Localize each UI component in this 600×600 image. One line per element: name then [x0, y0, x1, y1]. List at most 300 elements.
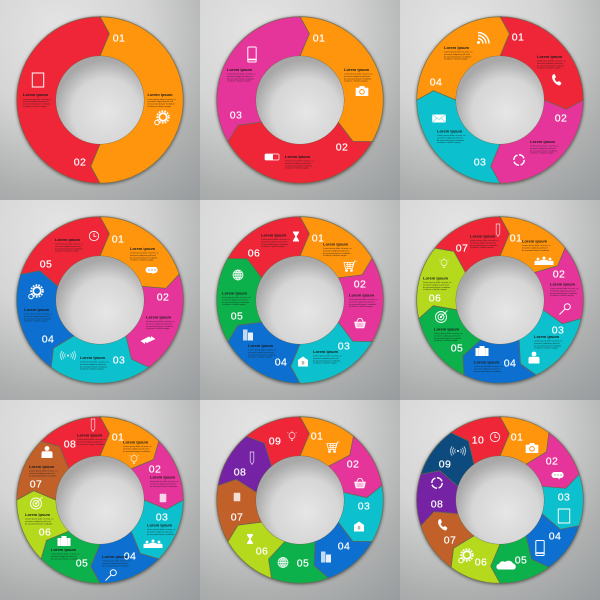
text block 07 — [29, 464, 58, 477]
text block 03: do eiusmod tempor incididunt — [313, 359, 341, 362]
icon: team — [534, 256, 554, 265]
text block 07: do eiusmod tempor incididunt — [470, 244, 498, 247]
number 06: 06 — [248, 248, 260, 260]
text block 02: Lorem ipsum — [146, 314, 172, 319]
panel background — [400, 0, 600, 200]
text block 03 — [437, 128, 466, 144]
text block 02: Lorem ipsum dolor sit amet, co — [150, 480, 179, 483]
text block 03: Lorem ipsum dolor sit amet, co — [147, 528, 176, 531]
number 02: 02 — [74, 157, 86, 169]
text block 06 — [25, 512, 54, 525]
text block 01: nsectetur adipiscing elit sed — [522, 246, 548, 250]
text block 03: Lorem ipsum dolor sit amet, co — [227, 73, 256, 76]
segment 06 — [0, 480, 78, 559]
text block 01: Lorem ipsum — [522, 238, 548, 243]
text block 01: do eiusmod tempor incididunt — [323, 252, 351, 255]
segment 06 — [404, 243, 473, 319]
text block 05 — [55, 237, 84, 253]
text block 03: nsectetur adipiscing elit sed — [227, 75, 253, 78]
segment 06 — [451, 536, 500, 583]
icon: tablet — [32, 73, 44, 87]
text block 02: do eiusmod tempor incididunt — [550, 292, 578, 295]
icon: home — [354, 522, 364, 532]
number 02: 02 — [553, 269, 565, 281]
segment 04 — [453, 325, 536, 403]
icon: globe — [278, 558, 288, 568]
text block 04 — [248, 343, 277, 359]
text block 03: Lorem ipsum — [534, 334, 560, 339]
text block 03: Lorem ipsum — [227, 67, 253, 72]
panel background — [0, 0, 200, 200]
text block 04: do eiusmod tempor incididunt — [102, 564, 130, 567]
number 01: 01 — [312, 233, 324, 245]
number 04: 04 — [504, 358, 516, 370]
text block 06 — [423, 275, 452, 291]
segment 04 — [80, 522, 159, 600]
text block 01: Lorem ipsum — [344, 67, 370, 72]
text block 03 — [80, 355, 109, 371]
text block 04: do eiusmod tempor incididunt — [444, 55, 472, 58]
text block 05: do eiusmod tempor incididunt — [51, 557, 79, 560]
text block 04: do eiusmod tempor incididunt — [24, 317, 52, 320]
segment 05 — [261, 532, 328, 597]
ring of 6 segments — [192, 196, 408, 404]
segment 01 — [100, 417, 159, 469]
icon: team — [144, 540, 162, 548]
number 05: 05 — [40, 259, 52, 271]
icon: battery — [265, 154, 279, 160]
text block 05: ut labore et dolore magna — [434, 339, 459, 342]
segment 08 — [406, 464, 466, 526]
segment 01 — [500, 217, 565, 273]
text block 03: nsectetur adipiscing elit sed — [437, 136, 463, 140]
text block 03: do eiusmod tempor incididunt — [437, 139, 465, 142]
text block 02: do eiusmod tempor incididunt — [146, 325, 174, 328]
text block 02: do eiusmod tempor incididunt — [150, 485, 178, 488]
text block 07: Lorem ipsum dolor sit amet, co — [29, 470, 58, 473]
text block 02: ut labore et dolore magna — [146, 327, 171, 330]
number 06: 06 — [256, 546, 268, 558]
segment 07 — [435, 197, 519, 283]
text block 04: nsectetur adipiscing elit sed — [248, 351, 274, 354]
text block 01: nsectetur adipiscing elit sed — [130, 254, 156, 257]
text block 05: Lorem ipsum dolor sit amet, co — [51, 553, 80, 556]
segment 03 — [283, 311, 372, 404]
segment 06 — [228, 196, 317, 289]
text block 02 — [146, 314, 175, 330]
number 03: 03 — [558, 492, 570, 504]
icon: cart — [327, 442, 340, 452]
icon: hourglass — [293, 232, 299, 242]
panel: 4-step ring — [400, 0, 600, 200]
number 02: 02 — [347, 459, 359, 471]
segment 02 — [222, 79, 372, 214]
text block 03 — [534, 334, 563, 350]
text block 01: Lorem ipsum dolor sit amet, co — [537, 60, 566, 63]
icon: bulb — [288, 430, 296, 440]
number 04: 04 — [549, 531, 561, 543]
centre circle — [256, 456, 344, 544]
text block 03: Lorem ipsum dolor sit amet, co — [534, 340, 563, 343]
segment 01 — [300, 17, 383, 142]
segment 07 — [17, 441, 69, 500]
icon: phone — [248, 47, 256, 62]
text block 04: nsectetur adipiscing elit sed — [444, 53, 470, 56]
text block 03: Lorem ipsum dolor sit amet, co — [437, 134, 466, 137]
text block 04: Lorem ipsum dolor sit amet, co — [24, 313, 53, 316]
text block 02: Lorem ipsum dolor sit amet, co — [285, 160, 314, 163]
text block 03: ut labore et dolore magna — [227, 80, 252, 83]
number 04: 04 — [430, 77, 442, 89]
number 01: 01 — [313, 33, 325, 45]
text block 03: Lorem ipsum — [147, 522, 173, 527]
text block 03: ut labore et dolore magna — [437, 141, 462, 144]
number 01: 01 — [113, 33, 125, 45]
segment 01 — [300, 417, 354, 466]
ring of 8 segments — [0, 399, 201, 600]
text block 02: Lorem ipsum — [150, 474, 176, 479]
text block 02 — [23, 92, 52, 108]
text block 04: Lorem ipsum — [102, 554, 128, 559]
number 06: 06 — [475, 557, 487, 569]
text block 03: nsectetur adipiscing elit sed — [313, 357, 339, 360]
panel: 10-step ring — [400, 400, 600, 600]
number 05: 05 — [451, 343, 463, 355]
text block 02: Lorem ipsum dolor sit amet, co — [23, 98, 52, 101]
icon: rss — [477, 32, 489, 44]
panel: 9-step ring — [200, 400, 400, 600]
text block 03: nsectetur adipiscing elit sed — [80, 363, 106, 366]
text block 04: Lorem ipsum — [444, 45, 470, 50]
number 09: 09 — [439, 459, 451, 471]
text block 02: do eiusmod tempor incididunt — [285, 164, 313, 167]
text block 01: Lorem ipsum — [123, 439, 149, 444]
number 08: 08 — [431, 499, 443, 511]
text block 01 — [344, 67, 373, 83]
text block 08 — [77, 432, 106, 446]
number 06: 06 — [429, 293, 441, 305]
text block 01: Lorem ipsum dolor sit amet, co — [123, 445, 152, 448]
text block 05: do eiusmod tempor incididunt — [434, 337, 462, 340]
segment 06 — [221, 513, 288, 578]
segment 02 — [122, 441, 201, 520]
text block 06: nsectetur adipiscing elit sed — [423, 284, 449, 286]
text block 05: nsectetur adipiscing elit sed — [434, 334, 460, 338]
icon: magnifier — [106, 570, 116, 580]
segment 03 — [131, 500, 183, 559]
panel background — [400, 200, 600, 400]
icon: mail — [432, 114, 446, 122]
text block 05: Lorem ipsum dolor sit amet, co — [222, 296, 251, 299]
text block 02 — [349, 292, 378, 308]
panel background — [200, 400, 400, 600]
text block 02 — [285, 154, 314, 170]
text block 02: do eiusmod tempor incididunt — [23, 102, 51, 105]
text block 01: do eiusmod tempor incididunt — [148, 102, 175, 105]
text block 01 — [123, 439, 152, 453]
text block 01 — [148, 92, 177, 108]
segment 05 — [21, 199, 113, 296]
text block 05: Lorem ipsum — [222, 290, 248, 295]
text block 06: Lorem ipsum — [423, 275, 449, 280]
centre circle — [456, 56, 544, 144]
centre circle — [256, 256, 344, 344]
text block 08: Lorem ipsum — [77, 432, 103, 437]
text block 06: Lorem ipsum dolor sit amet, co — [25, 518, 54, 521]
text block 06: do eiusmod tempor incididunt — [261, 243, 289, 246]
text block 02: do eiusmod tempor incididunt — [530, 149, 558, 152]
number 04: 04 — [124, 551, 136, 563]
icon: camera — [356, 86, 368, 96]
panel background — [0, 200, 200, 400]
number 01: 01 — [112, 234, 124, 246]
text block 06: nsectetur adipiscing elit sed — [261, 240, 287, 244]
text block 02: nsectetur adipiscing elit sed — [285, 162, 311, 165]
text block 01: Lorem ipsum — [537, 54, 563, 59]
text block 01: ut labore et dolore magna — [344, 80, 369, 83]
segment 01 — [300, 217, 372, 278]
text block 01: Lorem ipsum dolor sit amet, co — [344, 73, 373, 76]
text block 05: ut labore et dolore magna — [222, 303, 247, 306]
icon: cloud — [496, 561, 516, 570]
text block 01 — [522, 238, 551, 252]
icon: pencil — [496, 224, 500, 236]
number 03: 03 — [230, 110, 242, 122]
text block 02: ut labore et dolore magna — [550, 294, 575, 297]
segment 07 — [201, 470, 271, 542]
text block 03: ut labore et dolore magna — [313, 362, 338, 365]
number 06: 06 — [39, 527, 51, 539]
icon: briefcase — [476, 346, 488, 356]
number 03: 03 — [358, 501, 370, 513]
segment 02 — [491, 100, 583, 183]
text block 07 — [470, 233, 499, 249]
text block 01: ut labore et dolore magna — [130, 259, 155, 262]
text block 05: ut labore et dolore magna — [55, 250, 80, 253]
segment 05 — [405, 296, 488, 375]
text block 03: Lorem ipsum dolor sit amet, co — [313, 355, 342, 358]
text block 02: ut labore et dolore magna — [285, 167, 310, 170]
text block 04: Lorem ipsum — [24, 307, 50, 312]
icon: ring arrows — [432, 478, 442, 488]
icon: phone — [536, 540, 544, 556]
number 07: 07 — [30, 479, 42, 491]
icon: gears — [29, 285, 43, 299]
text block 03: ut labore et dolore magna — [534, 347, 559, 350]
text block 02: Lorem ipsum — [349, 292, 375, 297]
text block 01: Lorem ipsum dolor sit amet, co — [130, 252, 159, 255]
segment 03 — [43, 309, 149, 414]
number 04: 04 — [275, 357, 287, 369]
text block 02: nsectetur adipiscing elit sed — [349, 300, 375, 304]
text block 02 — [150, 474, 179, 488]
icon: cart — [344, 261, 356, 272]
number 05: 05 — [297, 558, 309, 570]
text block 05: Lorem ipsum dolor sit amet, co — [55, 243, 84, 246]
text block 02: nsectetur adipiscing elit sed — [150, 482, 176, 486]
icon: clock — [490, 432, 500, 442]
text block 02: Lorem ipsum dolor sit amet, co — [349, 298, 378, 301]
panel: 5-step ring — [0, 199, 204, 414]
text block 03: do eiusmod tempor incididunt — [80, 365, 108, 368]
icon: handset — [438, 519, 448, 530]
text block 03 — [227, 67, 256, 83]
number 01: 01 — [510, 233, 522, 245]
text block 06: nsectetur adipiscing elit sed — [25, 520, 51, 523]
text block 02: Lorem ipsum dolor sit amet, co — [530, 145, 559, 148]
text block 02: Lorem ipsum dolor sit amet, co — [146, 320, 175, 323]
text block 07: nsectetur adipiscing elit sed — [470, 242, 496, 244]
centre circle — [56, 256, 144, 344]
text block 05 — [434, 326, 463, 342]
icon: buildings — [243, 330, 253, 340]
segment 02 — [322, 436, 395, 509]
text block 02: Lorem ipsum — [23, 92, 49, 97]
ring of 4 segments — [417, 17, 583, 183]
text block 05 — [222, 290, 251, 306]
text block 03 — [147, 522, 176, 536]
panel: 8-step ring — [0, 399, 201, 600]
panel background — [400, 400, 600, 600]
icon: pencil — [91, 419, 95, 432]
segment 01 — [91, 17, 183, 183]
text block 01 — [323, 241, 352, 257]
segment 07 — [411, 500, 479, 567]
segment 08 — [41, 399, 120, 478]
segment 05 — [192, 249, 281, 342]
text block 02 — [530, 139, 559, 155]
number 09: 09 — [269, 436, 281, 448]
text block 01: do eiusmod tempor incididunt — [537, 64, 565, 67]
text block 02: ut labore et dolore magna — [349, 305, 374, 308]
text block 02: nsectetur adipiscing elit sed — [530, 147, 556, 150]
text block 08: do eiusmod tempor incididunt — [77, 443, 105, 446]
text block 02: Lorem ipsum — [285, 154, 311, 159]
icon: handset — [552, 74, 562, 86]
icon: clock — [89, 231, 99, 241]
panel: 7-step ring — [400, 197, 600, 403]
icon: home — [298, 356, 308, 366]
number 01: 01 — [511, 432, 523, 444]
icon: gears — [459, 549, 473, 563]
text block 03: Lorem ipsum dolor sit amet, co — [80, 361, 109, 364]
number 02: 02 — [546, 456, 558, 468]
text block 06: ut labore et dolore magna — [261, 245, 286, 248]
number 03: 03 — [156, 512, 168, 524]
icon: person — [528, 352, 540, 364]
icon: chat — [146, 267, 158, 275]
text block 05: Lorem ipsum — [55, 237, 81, 242]
text block 01: do eiusmod tempor incididunt — [123, 450, 151, 453]
ring of 5 segments — [0, 199, 204, 414]
segment 02 — [319, 258, 408, 351]
segment 02 — [17, 17, 109, 183]
number 03: 03 — [338, 341, 350, 353]
text block 07: ut labore et dolore magna — [470, 246, 495, 249]
number 05: 05 — [515, 555, 527, 567]
icon: person — [42, 446, 52, 458]
centre circle — [456, 456, 544, 544]
number 07: 07 — [231, 512, 243, 524]
ring of 9 segments — [201, 402, 395, 597]
segment 01 — [500, 17, 583, 109]
icon: gears — [155, 111, 169, 125]
text block 01: Lorem ipsum — [130, 246, 156, 251]
number 07: 07 — [456, 243, 468, 255]
text block 01 — [130, 246, 159, 262]
text block 07: nsectetur adipiscing elit sed — [29, 472, 55, 475]
icon: target — [30, 497, 42, 509]
text block 05: nsectetur adipiscing elit sed — [51, 555, 77, 558]
text block 04: Lorem ipsum — [474, 359, 500, 364]
text block 02: Lorem ipsum dolor sit amet, co — [550, 287, 579, 290]
text block 03: do eiusmod tempor incididunt — [534, 344, 562, 347]
text block 06 — [261, 232, 290, 248]
segment 10 — [451, 404, 519, 471]
segment 03 — [186, 7, 336, 142]
text block 05: Lorem ipsum dolor sit amet, co — [434, 332, 463, 335]
text block 02: Lorem ipsum — [550, 281, 576, 286]
text block 04: Lorem ipsum dolor sit amet, co — [102, 560, 131, 563]
number 01: 01 — [112, 432, 124, 444]
segment 08 — [218, 433, 276, 494]
text block 01: do eiusmod tempor incididunt — [522, 249, 550, 252]
text block 01: Lorem ipsum — [323, 241, 349, 246]
text block 02: nsectetur adipiscing elit sed — [146, 322, 172, 326]
segment 04 — [417, 17, 509, 100]
icon: clipboard — [160, 494, 166, 502]
text block 03: nsectetur adipiscing elit sed — [147, 530, 173, 534]
text block 08: nsectetur adipiscing elit sed — [77, 440, 103, 444]
text block 01: Lorem ipsum — [148, 92, 173, 97]
number 02: 02 — [157, 292, 169, 304]
icon: handshake — [140, 336, 156, 344]
number 02: 02 — [149, 464, 161, 476]
text block 01: Lorem ipsum dolor sit amet, co — [522, 244, 551, 247]
text block 05 — [51, 547, 80, 560]
text block 01: ut labore et dolore magna — [148, 105, 172, 108]
icon: briefcase — [58, 536, 70, 546]
text block 04: Lorem ipsum dolor sit amet, co — [248, 349, 277, 352]
segment 05 — [481, 529, 549, 596]
panel background — [200, 0, 400, 200]
number 04: 04 — [42, 334, 54, 346]
number 05: 05 — [231, 311, 243, 323]
icon: buildings — [321, 552, 331, 562]
text block 04 — [474, 359, 503, 373]
text block 04 — [24, 307, 53, 323]
segment 01 — [100, 217, 179, 288]
ring of 7 segments — [404, 197, 600, 403]
segment 01 — [500, 417, 549, 464]
text block 01: nsectetur adipiscing elit sed — [148, 100, 174, 103]
number 08: 08 — [234, 467, 246, 479]
text block 05: nsectetur adipiscing elit sed — [55, 245, 81, 248]
text block 01: nsectetur adipiscing elit sed — [537, 62, 563, 65]
segment 04 — [302, 517, 372, 588]
icon: target — [436, 310, 448, 322]
text block 07: do eiusmod tempor incididunt — [29, 474, 57, 477]
number 10: 10 — [472, 435, 484, 447]
text block 03: Lorem ipsum — [437, 128, 463, 133]
segment 05 — [41, 531, 100, 583]
text block 07: Lorem ipsum — [470, 233, 496, 238]
text block 02: nsectetur adipiscing elit sed — [23, 100, 49, 103]
text block 07: Lorem ipsum dolor sit amet, co — [470, 239, 499, 242]
centre circle — [56, 56, 144, 144]
text block 07: Lorem ipsum — [29, 464, 55, 469]
segment 03 — [512, 306, 581, 382]
